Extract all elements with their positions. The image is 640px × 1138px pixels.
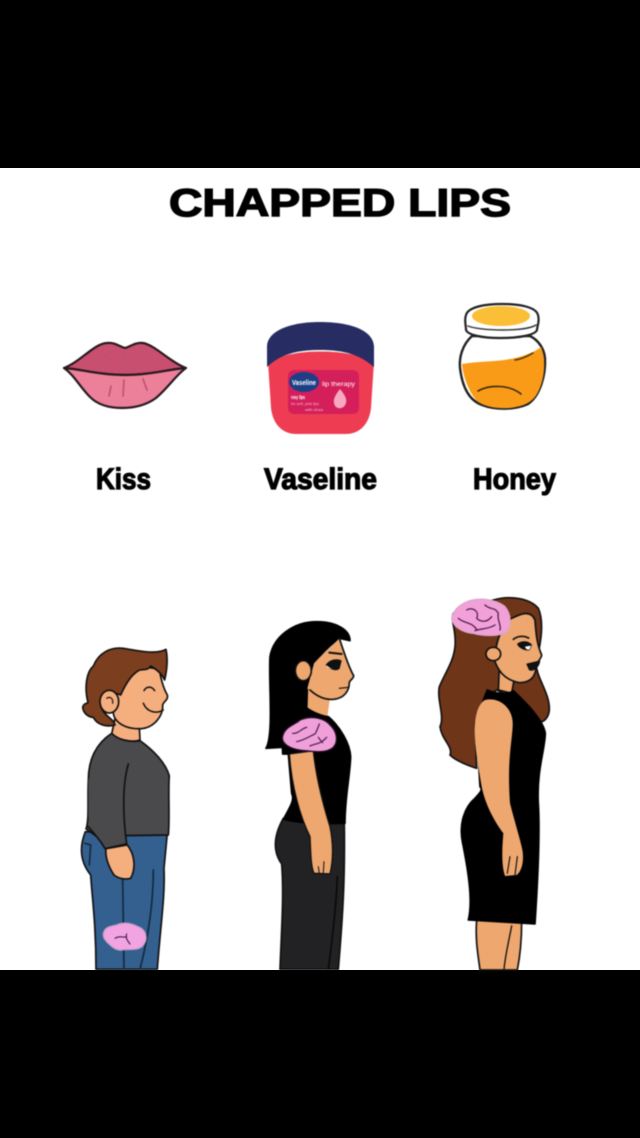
hand [106, 845, 134, 879]
smiling eye and mouth [143, 687, 163, 712]
label: honey: Honey [473, 463, 556, 496]
icon: honey jar [460, 304, 545, 409]
jar label: lip therapy [322, 382, 355, 388]
neck [305, 688, 330, 717]
face [307, 638, 354, 699]
label: kiss: Kiss [96, 463, 151, 496]
brain on head [452, 599, 510, 635]
hair [266, 622, 350, 748]
legs [476, 920, 522, 970]
title: CHAPPED LIPS [169, 182, 511, 225]
label: vaseline: Vaseline [264, 463, 377, 496]
jeans [82, 832, 167, 969]
jar rim [465, 304, 539, 338]
sleeve [88, 763, 128, 849]
face [495, 614, 542, 683]
jar glass [460, 336, 545, 409]
hair [83, 648, 167, 726]
hair [439, 598, 549, 768]
figure: boy with brain at knee [82, 648, 169, 969]
dress [461, 690, 545, 924]
ear [486, 647, 501, 661]
brain at knee [103, 923, 146, 950]
ear [100, 690, 119, 713]
neck [498, 668, 514, 693]
jar label: Vaseline [292, 380, 316, 387]
sweater [86, 733, 169, 836]
jar lid [267, 322, 374, 367]
brain at shoulder [282, 718, 336, 752]
icon: lips [64, 343, 186, 408]
figure: girl with brain at shoulder [266, 622, 354, 969]
jar label: with shea [305, 407, 324, 412]
honey fill [462, 347, 544, 408]
figure: woman with brain on head [439, 598, 549, 970]
ear [295, 661, 311, 681]
icon: vaseline jar [267, 322, 374, 434]
jar label: for soft, pink lips [291, 401, 319, 406]
face [113, 668, 168, 729]
neck [112, 718, 140, 741]
eye and lips [513, 636, 529, 639]
jar label [288, 370, 359, 414]
arm [475, 699, 523, 876]
jar label: rosy lips [291, 395, 305, 401]
jar body [268, 352, 374, 434]
pants [275, 818, 344, 969]
black top [282, 707, 351, 824]
arm [289, 751, 332, 874]
eye and mouth [329, 653, 342, 654]
